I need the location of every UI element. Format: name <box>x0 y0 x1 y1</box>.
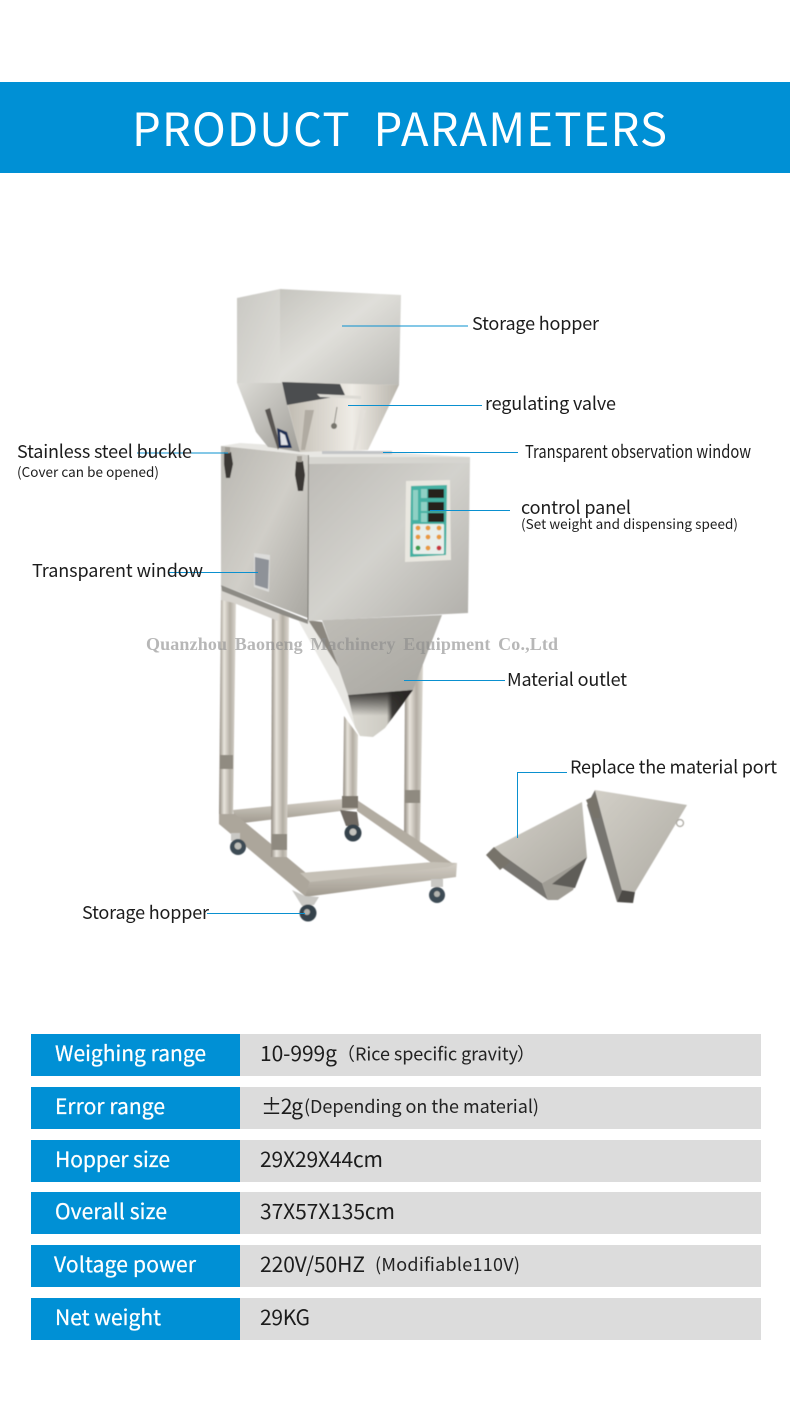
spec row: net weight: Net weight <box>55 1302 161 1332</box>
spec row: net weight <box>31 1298 761 1340</box>
spec row: voltage power <box>31 1245 761 1287</box>
spec row: weighing range: ） <box>517 1040 535 1066</box>
spec row: net weight: 29KG <box>260 1302 310 1332</box>
front legs <box>219 592 289 857</box>
buckles <box>224 447 305 491</box>
spec row: voltage power: (Modifiable110V) <box>375 1251 520 1277</box>
callout: stainless steel buckle: Stainless steel buckle <box>17 438 192 464</box>
buttons <box>416 526 441 550</box>
main body <box>221 443 470 624</box>
header banner <box>0 82 790 173</box>
callout: control panel <box>430 494 738 533</box>
base frame <box>219 796 457 897</box>
spec row: hopper size: Hopper size <box>55 1144 170 1174</box>
casters <box>230 810 445 922</box>
spec row: error range: ±2g <box>261 1091 303 1121</box>
hopper <box>237 289 401 454</box>
spec row: weighing range <box>31 1034 761 1076</box>
spec row: weighing range: （ <box>337 1040 355 1066</box>
control panel <box>405 480 451 562</box>
machine illustration <box>219 289 470 922</box>
leg gusset <box>221 588 278 621</box>
left port <box>486 802 587 900</box>
spec row: voltage power: Voltage power <box>54 1249 197 1279</box>
right port <box>586 790 687 903</box>
callout: control panel: control panel <box>521 494 631 520</box>
spec row: weighing range: Weighing range <box>55 1038 206 1068</box>
callout: control panel: (Set weight and dispensing speed) <box>521 513 738 533</box>
callout: stainless steel buckle <box>17 438 228 481</box>
spec row: error range: (Depending on the material) <box>304 1093 539 1119</box>
display readouts <box>413 489 444 522</box>
rear legs <box>343 665 423 842</box>
transparent window <box>254 553 270 592</box>
spec row: error range: Error range <box>55 1091 165 1121</box>
spec row: overall size: Overall size <box>55 1196 167 1226</box>
callout: replace the material port <box>518 754 777 838</box>
title: PRODUCT PARAMETERS <box>132 94 667 160</box>
callout: regulating valve: regulating valve <box>485 390 616 416</box>
callout: stainless steel buckle: (Cover can be opened) <box>17 461 159 481</box>
spec row: voltage power: 220V/50HZ <box>260 1249 365 1279</box>
watermark: Quanzhou Baoneng Machinery Equipment Co.,Ltd <box>146 634 558 654</box>
material outlet <box>297 615 442 737</box>
callout: replace the material port: Replace the material port <box>570 754 777 780</box>
spec row: overall size: 37X57X135cm <box>260 1196 395 1226</box>
spec row: weighing range: Rice specific gravity <box>355 1040 519 1066</box>
spec row: overall size <box>31 1192 761 1234</box>
callout: storage hopper base: Storage hopper <box>82 899 210 925</box>
spec row: hopper size: 29X29X44cm <box>260 1144 383 1174</box>
callout: material outlet: Material outlet <box>507 666 627 692</box>
spec row: weighing range: 10-999g <box>260 1038 337 1068</box>
callout: storage hopper: Storage hopper <box>472 310 600 336</box>
replacement material ports <box>486 790 687 903</box>
spec row: error range <box>31 1087 761 1129</box>
spec row: hopper size <box>31 1140 761 1182</box>
callout: transparent window: Transparent window <box>32 557 203 583</box>
